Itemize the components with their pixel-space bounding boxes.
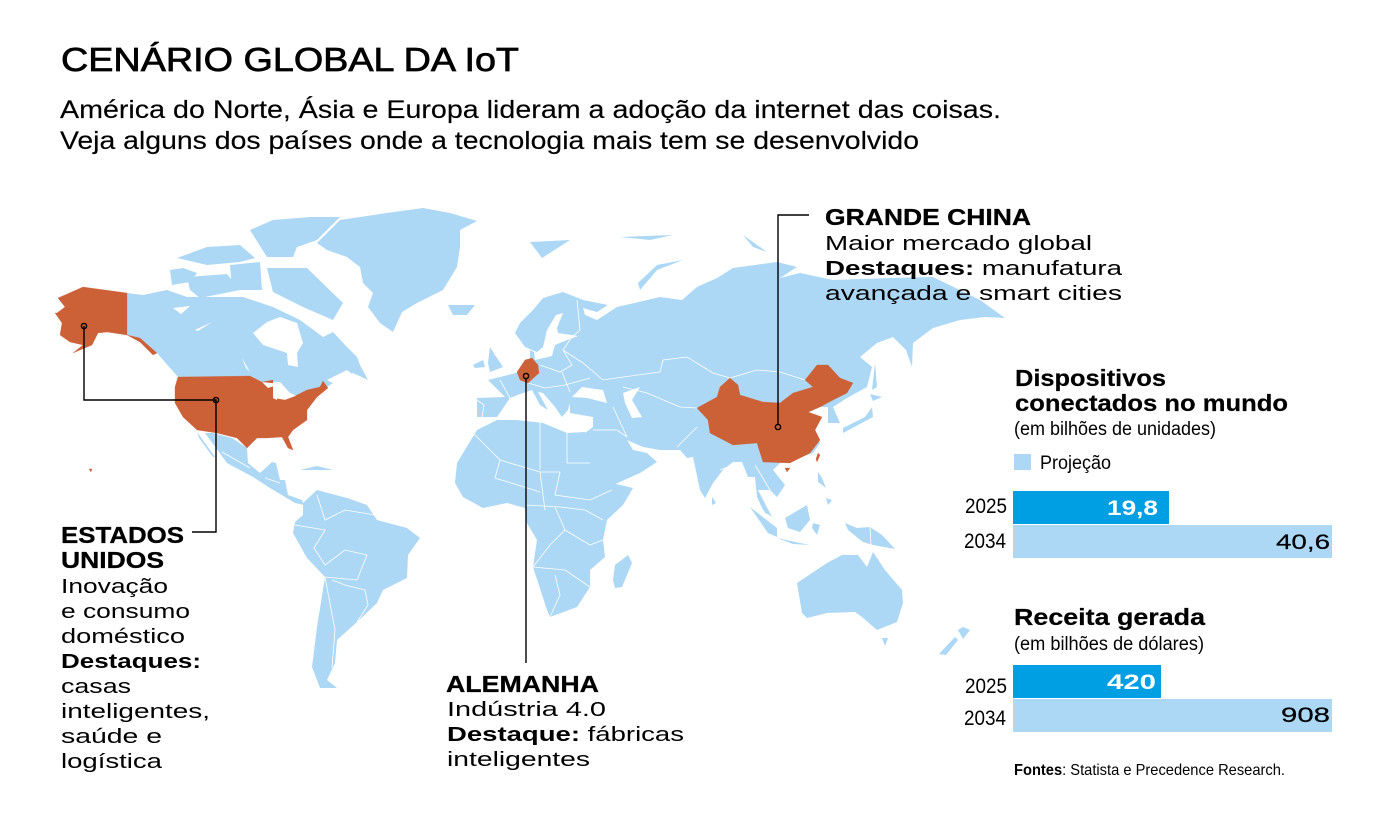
map: South America bbox=[293, 490, 420, 688]
bar chart: revenue: 420 bbox=[1107, 671, 1156, 694]
bar chart: revenue bbox=[964, 665, 1332, 732]
map: North America bbox=[127, 208, 477, 505]
text: Germany: Indústria 4.0 bbox=[447, 699, 606, 721]
panel: revenue chart bbox=[964, 604, 1332, 732]
bar chart: revenue: 2034 bbox=[964, 707, 1006, 730]
subtitle: Veja alguns dos países onde a tecnologia mais tem se desenvolvido bbox=[60, 127, 919, 155]
text: Germany bbox=[446, 671, 684, 771]
text: United States: logística bbox=[61, 751, 163, 773]
legend: projection: Projeção bbox=[1040, 453, 1111, 474]
leader line: United States bbox=[81, 323, 219, 532]
text: United States: e consumo bbox=[61, 601, 190, 623]
sources: Fontes: Statista e Precedence Research. bbox=[1014, 762, 1285, 779]
text: United States: ESTADOS bbox=[61, 522, 184, 548]
text: United States bbox=[61, 522, 210, 773]
highlighted country: United States bbox=[55, 287, 328, 472]
country borders bbox=[222, 300, 871, 668]
heading: connected devices: conectados no mundo bbox=[1015, 390, 1288, 416]
text: United States: Inovação bbox=[61, 576, 168, 598]
text: Germany: ALEMANHA bbox=[446, 671, 599, 697]
heading: connected devices: Dispositivos bbox=[1015, 365, 1166, 391]
units note: (em bilhões de dólares) bbox=[1014, 634, 1204, 655]
text: United States: UNIDOS bbox=[61, 547, 164, 573]
text: United States: inteligentes, bbox=[61, 701, 210, 723]
callout: United States bbox=[61, 323, 219, 773]
text: Greater China: GRANDE CHINA bbox=[825, 204, 1031, 230]
panel: connected devices chart bbox=[964, 365, 1332, 558]
highlighted country: Germany bbox=[517, 358, 539, 383]
subtitle: América do Norte, Ásia e Europa lideram a adoção da internet das coisas. bbox=[60, 95, 1001, 124]
text: Germany: Destaque: fábricas bbox=[447, 724, 684, 746]
heading: connected devices bbox=[1015, 365, 1288, 416]
subtitle bbox=[60, 95, 1001, 155]
inland seas bbox=[572, 387, 642, 418]
text: United States: Destaques: bbox=[61, 651, 201, 673]
bar chart: devices: 2025 bbox=[965, 495, 1007, 518]
heading: revenue: Receita gerada bbox=[1014, 604, 1205, 630]
text: Greater China: Destaques: manufatura bbox=[825, 258, 1123, 280]
map: Africa bbox=[455, 420, 633, 617]
leader line: Germany bbox=[523, 373, 529, 663]
Great Lakes bbox=[262, 382, 296, 400]
bar chart: revenue: 908 bbox=[1281, 704, 1330, 727]
units note: (em bilhões de unidades) bbox=[1014, 419, 1216, 440]
bar chart: devices: 40,6 bbox=[1276, 531, 1330, 554]
callout: Germany bbox=[446, 373, 684, 771]
Hudson Bay and lakes bbox=[173, 306, 357, 387]
highlighted country: China bbox=[697, 365, 853, 472]
bar chart: devices: 19,8 bbox=[1107, 497, 1158, 520]
callout: Greater China bbox=[775, 204, 1123, 430]
text: Greater China: Maior mercado global bbox=[825, 233, 1092, 255]
world map bbox=[55, 208, 1005, 688]
text: United States: doméstico bbox=[61, 626, 185, 648]
text: Greater China: avançada e smart cities bbox=[825, 283, 1122, 305]
bar chart: devices bbox=[964, 491, 1332, 558]
leader line: Greater China bbox=[775, 215, 809, 430]
map: Oceania and Indonesia bbox=[750, 497, 970, 655]
bar chart: revenue: 2025 bbox=[965, 675, 1007, 698]
text: United States: saúde e bbox=[61, 726, 162, 748]
bar chart: devices: 2034 bbox=[964, 530, 1006, 553]
title: CENÁRIO GLOBAL DA IoT bbox=[61, 41, 519, 78]
map: Eurasia bbox=[473, 235, 1005, 517]
text: Germany: inteligentes bbox=[447, 749, 590, 771]
text: United States: casas bbox=[61, 676, 131, 698]
text: Greater China bbox=[825, 204, 1123, 305]
